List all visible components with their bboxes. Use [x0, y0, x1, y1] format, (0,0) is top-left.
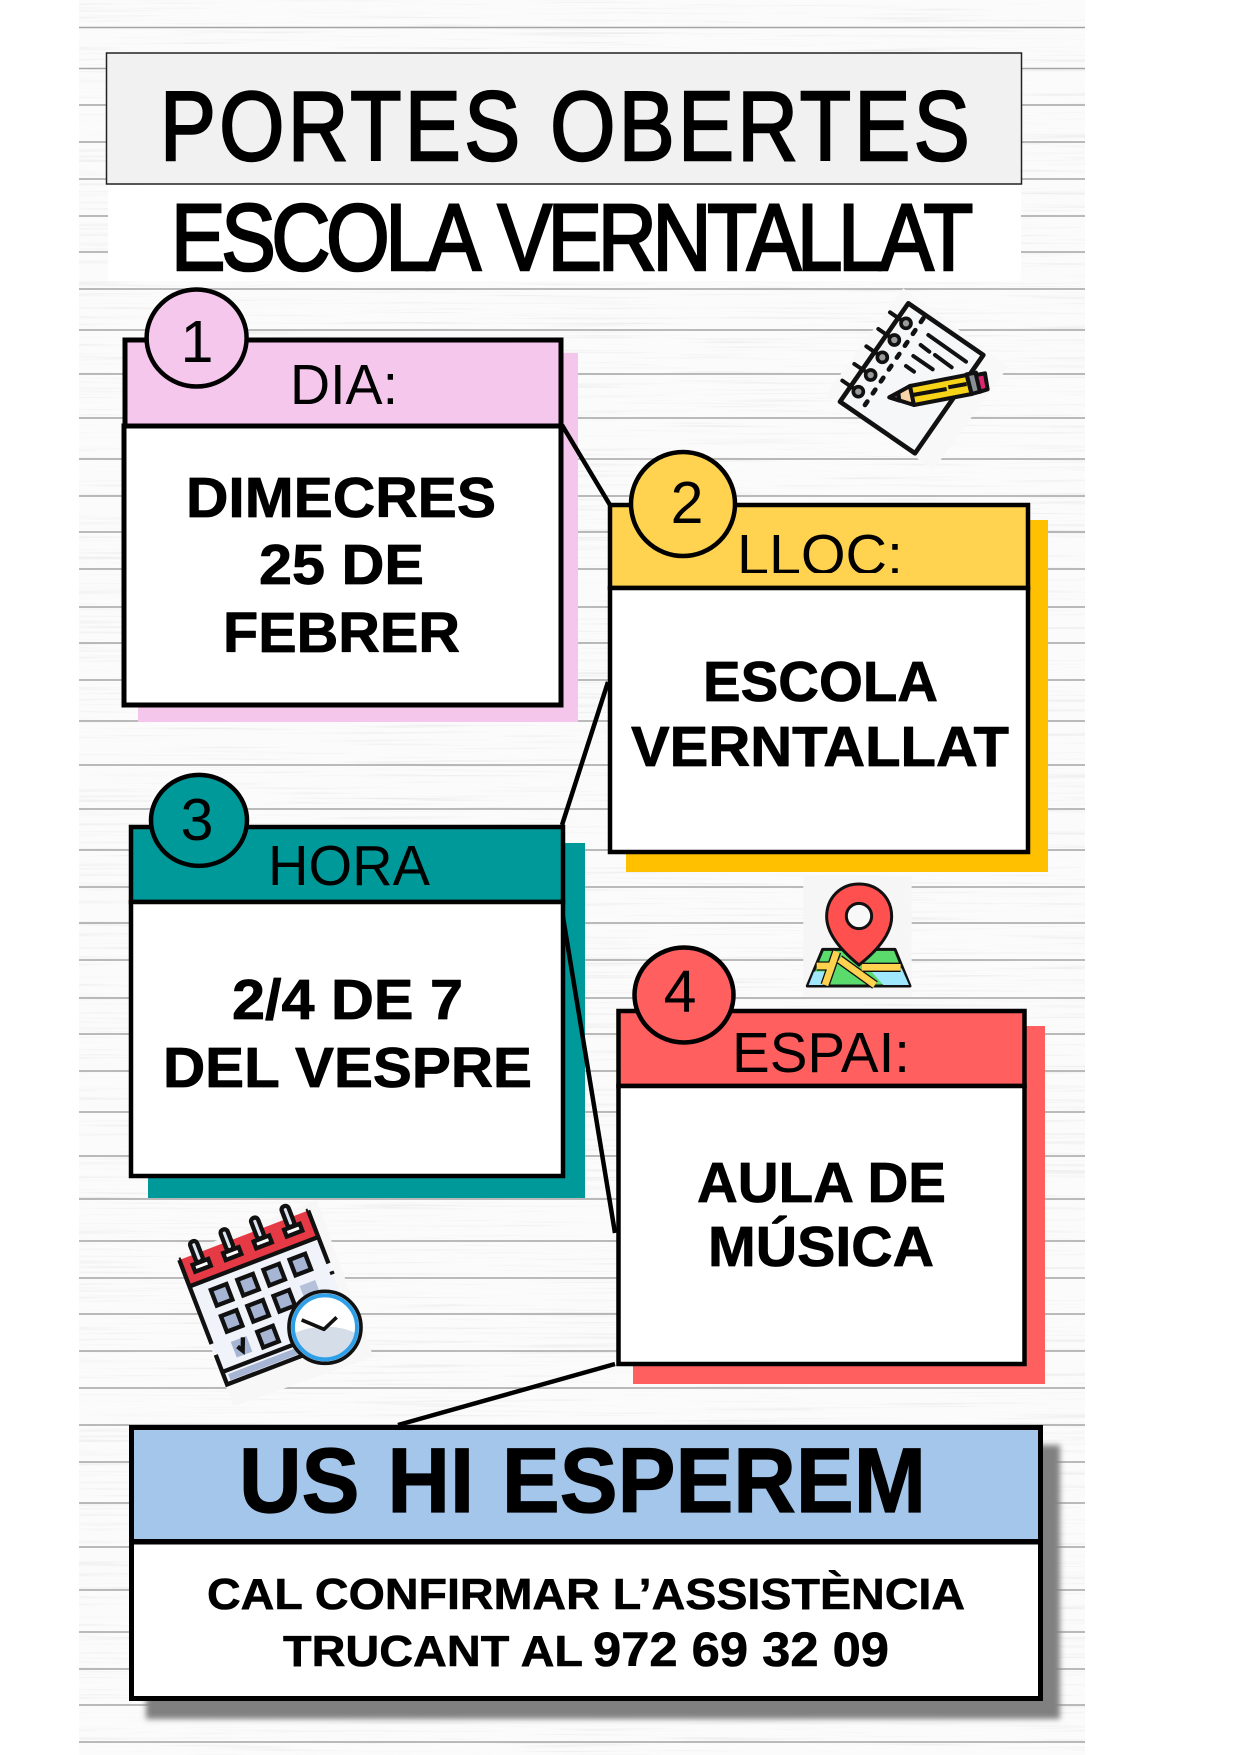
panel text: 972 69 32 09 — [593, 1624, 889, 1677]
card shadow: hora — [148, 843, 585, 1198]
icon: notebook and pencil — [827, 288, 1008, 470]
panel heading: US HI ESPEREM — [239, 1430, 926, 1532]
card 4 label: ESPAI: — [732, 1021, 910, 1085]
card 1 number: 1 — [181, 309, 213, 375]
card 2 value — [631, 650, 1009, 779]
card 2: lloc — [610, 452, 1028, 852]
panel text: TRUCANT AL — [283, 1627, 583, 1676]
card 1 label: DIA: — [290, 353, 398, 417]
card 2 body — [610, 588, 1028, 852]
card 2 value: ESCOLA — [703, 650, 938, 714]
card 4 value: AULA DE — [697, 1151, 946, 1215]
call to action panel — [132, 1428, 1060, 1719]
card 1 body — [124, 426, 561, 705]
card 1 value — [186, 466, 496, 665]
school name heading: ESCOLA VERNTALLAT — [171, 185, 972, 291]
panel body — [132, 1542, 1040, 1698]
card 3 value — [163, 968, 532, 1100]
card 4 value: MÚSICA — [708, 1215, 934, 1279]
card shadow: espai — [633, 1026, 1045, 1384]
card 4 header — [618, 1011, 1024, 1086]
panel text: CAL CONFIRMAR L’ASSISTÈNCIA — [207, 1569, 965, 1619]
card 4 body — [618, 1086, 1024, 1364]
card 1: dia — [124, 290, 561, 705]
card 4 number badge — [634, 948, 734, 1042]
panel header — [132, 1428, 1040, 1542]
card 1 number badge — [147, 290, 247, 386]
card 1 value: 25 DE — [259, 533, 424, 597]
panel drop shadow — [146, 1445, 1060, 1719]
card 3 number: 3 — [181, 787, 213, 853]
card 2 number: 2 — [671, 470, 703, 536]
card 2 value: VERNTALLAT — [631, 715, 1009, 779]
card 1 header — [125, 340, 561, 426]
card 2 number badge — [631, 452, 735, 556]
card 4: espai — [618, 948, 1024, 1364]
card 3 header — [131, 827, 563, 902]
card 2 label: LLOC: — [737, 523, 903, 587]
connector lines between cards — [398, 425, 615, 1425]
card 3 number badge — [151, 775, 247, 866]
card 3: hora — [131, 775, 563, 1176]
card 3 label: HORA — [268, 834, 430, 898]
card 1 value: FEBRER — [223, 601, 460, 665]
card 3 value: 2/4 DE 7 — [232, 968, 463, 1032]
icon: calendar and clock — [175, 1199, 373, 1407]
panel text — [207, 1569, 965, 1677]
card 4 value — [697, 1151, 946, 1279]
card 2 header — [610, 505, 1028, 588]
card 4 number: 4 — [664, 959, 696, 1025]
card 1 value: DIMECRES — [186, 466, 496, 530]
card 3 value: DEL VESPRE — [163, 1036, 532, 1100]
card 3 body — [131, 902, 563, 1176]
title banner: PORTES OBERTES — [160, 71, 973, 181]
card shadow: lloc — [626, 520, 1048, 872]
card shadow: dia — [138, 353, 578, 722]
icon: map pin — [803, 876, 912, 997]
